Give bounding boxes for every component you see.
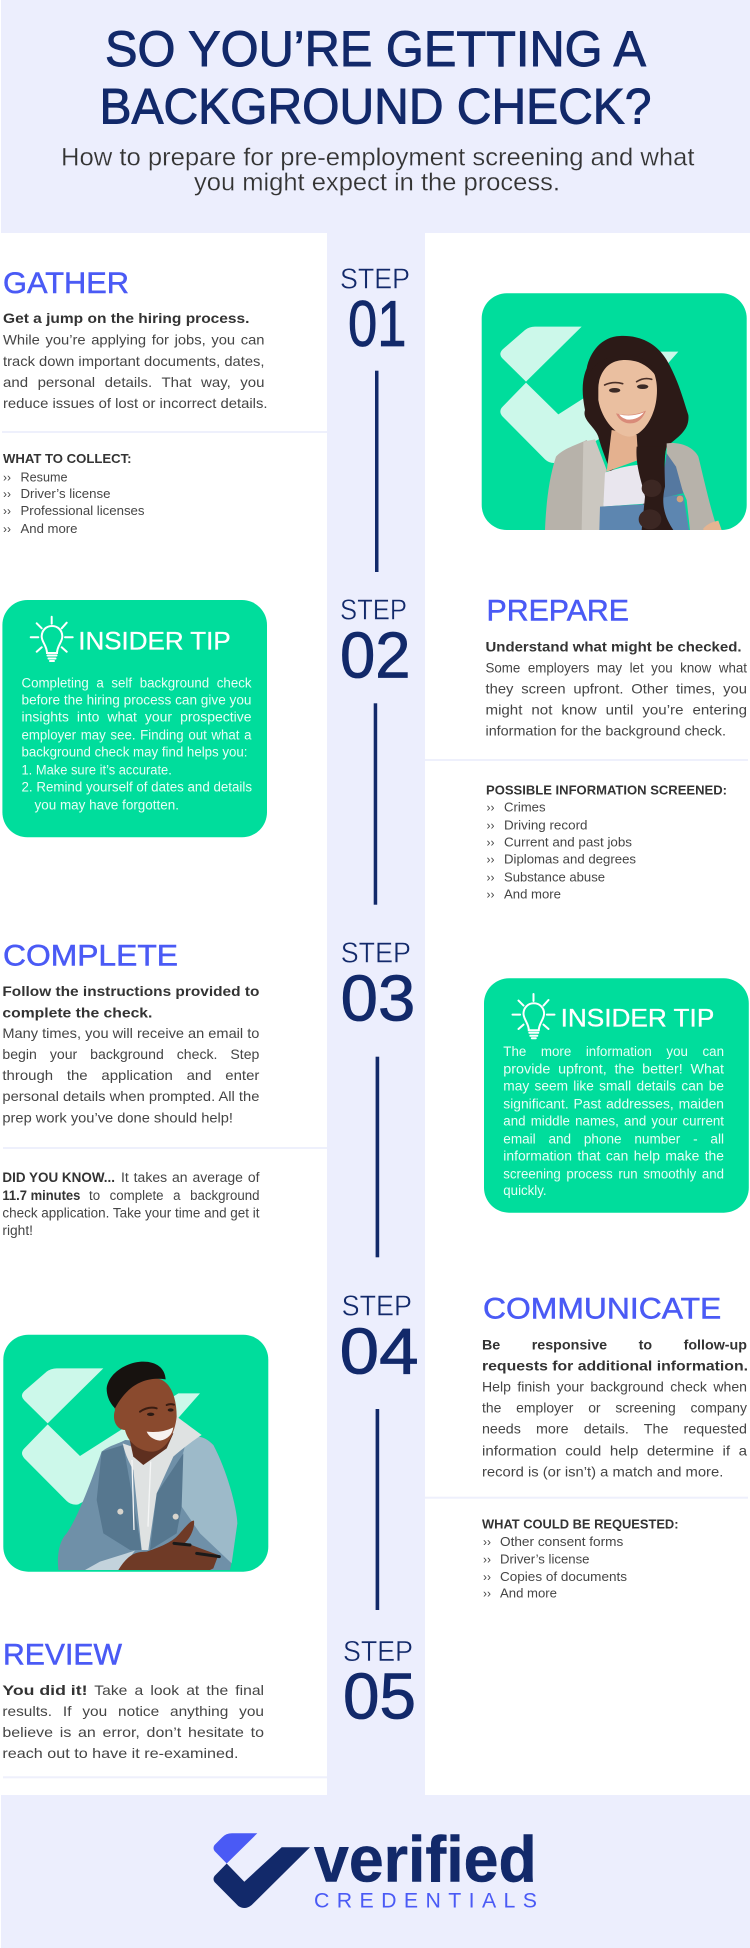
woman figure [545,336,722,530]
step 1 marker: STEP [340,264,410,296]
prepare text block: they screen upfront. Other times, you [486,680,747,696]
possible information list: ›› [486,800,494,814]
what could be requested list: ›› [483,1552,491,1566]
panel: gather [2,267,327,536]
communicate text block: record is (or isn’t) a match and more. [482,1464,723,1480]
step 2 marker: 02 [340,618,410,691]
communicate text block: the employer or screening company [482,1400,747,1416]
panel: insider tip 1 [2,600,267,837]
what could be requested list: ›› [483,1570,491,1584]
tip text: may seem like small details can be [503,1079,724,1094]
possible information list: ›› [486,871,494,885]
tip text: employer may see. Finding out what a [22,727,252,742]
did you know callout: right! [2,1223,33,1238]
review text block: Take a look at the final [94,1682,264,1698]
what to collect list: ›› [3,522,11,536]
gather text block: While you’re applying for jobs, you can [3,332,264,348]
step 2 marker: STEP [340,595,407,627]
subtitle: you might expect in the process. [194,168,560,196]
icon: lightbulb [31,617,73,661]
subtitle [61,143,695,196]
what to collect list: Professional licenses [20,503,145,518]
gather text block [3,310,268,411]
tip text: significant. Past addresses, maiden [503,1096,724,1111]
complete text block [2,983,260,1126]
heading: gather: GATHER [3,267,129,300]
logo check mark [214,1833,310,1908]
watermark check [22,1368,200,1505]
complete text block: through the application and enter [2,1067,260,1083]
what could be requested list: WHAT COULD BE REQUESTED: [482,1517,678,1532]
tip text [22,676,252,812]
step 4 connector line [376,1409,379,1610]
tip text: 2. Remind yourself of dates and details [22,780,252,795]
logo wordmark: verified [314,1823,537,1896]
what to collect list [3,451,145,536]
what could be requested list: ›› [483,1587,491,1601]
gather text block: track down important documents, dates, [3,353,264,369]
communicate text block [482,1336,748,1480]
possible information list: ›› [486,852,494,866]
logo: verified credentials [214,1823,537,1912]
did you know callout: DID YOU KNOW... [2,1170,115,1185]
step 4 marker: 04 [340,1314,419,1387]
did you know callout: check application. Take your time and get it [2,1205,260,1220]
step 1 connector line [375,371,378,572]
heading: review: REVIEW [3,1638,123,1671]
header panel [1,0,750,233]
complete text block: Many times, you will receive an email to [2,1025,260,1041]
tip heading: INSIDER TIP [561,1006,714,1033]
what could be requested list: ›› [483,1535,491,1549]
possible information list: And more [504,887,561,902]
complete text block: prep work you’ve done should help! [2,1110,233,1126]
did you know callout: It takes an average of [121,1170,260,1185]
possible information list: Diplomas and degrees [504,851,637,866]
what could be requested list: Copies of documents [500,1569,628,1584]
tip text: you may have forgotten. [34,797,179,812]
review text block [2,1682,264,1761]
what could be requested list: Driver’s license [500,1552,590,1566]
what could be requested list: And more [500,1586,557,1601]
panel: review [2,1638,327,1778]
tip text: The more information you can [503,1044,724,1059]
step 2 connector line [374,703,377,905]
what to collect list: ›› [3,504,11,518]
step 5 marker: STEP [343,1636,413,1668]
what to collect list: And more [20,521,78,536]
did you know callout: 11.7 minutes [2,1188,80,1203]
tip text [503,1044,724,1198]
review text block: results. If you notice anything you [2,1703,264,1719]
what to collect list: ›› [3,470,11,484]
prepare text block: might not know until you’re entering [486,701,747,717]
title [100,21,652,135]
photo card: laughing man [3,1335,268,1572]
tip text: quickly. [503,1183,547,1198]
step 5 marker: 05 [343,1660,416,1733]
complete text block: complete the check. [2,1004,152,1020]
footer panel [1,1795,750,1948]
heading: communicate: COMMUNICATE [483,1292,721,1325]
review text block: reach out to have it re-examined. [2,1745,239,1761]
what to collect list: Driver’s license [20,486,110,501]
communicate text block: information could help determine if a [482,1442,747,1458]
communicate text block: needs more details. The requested [482,1421,747,1437]
tip text: 1. Make sure it’s accurate. [22,762,172,777]
what to collect list: Resume [20,469,68,484]
prepare text block: information for the background check. [486,722,726,738]
possible information list: POSSIBLE INFORMATION SCREENED: [486,782,727,797]
review text block: You did it! [2,1682,87,1698]
tip text: before the hiring process can give you [22,693,252,708]
communicate text block: Help finish your background check when [482,1379,747,1395]
complete text block: personal details when prompted. All the [2,1088,260,1104]
communicate text block: requests for additional information. [482,1357,748,1373]
heading: prepare: PREPARE [486,595,629,628]
tip text: background check may find helps you: [22,745,248,760]
what could be requested list [482,1517,678,1601]
gather text block: reduce issues of lost or incorrect details. [3,395,268,411]
step 1 marker [340,264,410,360]
tip text: insights into what your prospective [22,710,252,725]
possible information list: Current and past jobs [504,835,633,850]
tip text: provide upfront, the better! What [503,1061,724,1076]
step 3 marker: STEP [341,938,411,970]
tip text: screening process run smoothly and [503,1166,724,1181]
possible information list: ›› [486,818,494,832]
subtitle: How to prepare for pre-employment screening and what [61,143,695,171]
possible information list: Crimes [504,799,546,814]
review text block: believe is an error, don’t hesitate to [2,1724,264,1740]
man figure [58,1362,237,1570]
possible information list: Substance abuse [504,870,605,885]
possible information list [486,782,727,902]
tip heading: INSIDER TIP [78,628,231,656]
possible information list: ›› [486,836,494,850]
panel: communicate [425,1292,748,1601]
center column band [327,233,425,1795]
tip text: email and phone number - all [503,1131,724,1146]
panel: complete [2,939,327,1238]
tip text: Completing a self background check [22,676,252,691]
heading: complete: COMPLETE [3,939,178,972]
complete text block: Follow the instructions provided to [2,983,259,999]
title: SO YOU’RE GETTING A [105,21,647,77]
panel: prepare [425,595,748,902]
watermark check [500,327,678,463]
panel: insider tip 2 [484,978,749,1213]
prepare text block [486,638,747,738]
prepare text block: Understand what might be checked. [486,638,742,654]
tip text: information that can help make the [503,1149,724,1164]
gather text block: and personal details. That way, you [3,374,264,390]
step 4 marker: STEP [342,1291,412,1323]
complete text block: begin your background check. Step [2,1046,260,1062]
step 3 marker: 03 [341,962,415,1035]
step 1 marker: 01 [348,287,406,360]
did you know callout [2,1170,260,1238]
did you know callout: to complete a background [89,1188,260,1203]
photo card: smiling woman [482,293,747,530]
gather text block: Get a jump on the hiring process. [3,310,249,326]
possible information list: ›› [486,888,494,902]
what to collect list: WHAT TO COLLECT: [3,451,132,466]
what to collect list: ›› [3,487,11,501]
logo tagline: CREDENTIALS [314,1888,537,1912]
what could be requested list: Other consent forms [500,1534,624,1549]
icon: lightbulb [512,994,554,1038]
step 4 marker [340,1291,419,1387]
possible information list: Driving record [504,817,588,832]
title: BACKGROUND CHECK? [100,79,652,135]
tip text: and middle names, and your current [503,1113,724,1128]
step 3 connector line [376,1057,379,1257]
communicate text block: Be responsive to follow-up [482,1336,747,1352]
